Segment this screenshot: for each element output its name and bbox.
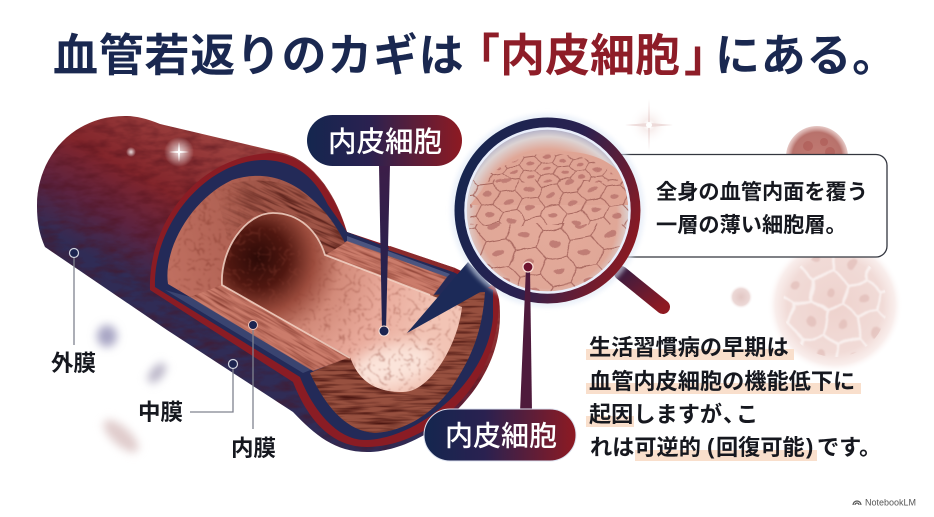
magnifier pointer wedge (407, 262, 491, 333)
lumen rim highlight (222, 213, 430, 358)
decoration: blurred particles (97, 325, 169, 457)
highlight sparkles (126, 137, 194, 167)
magnifier dot (523, 262, 533, 272)
explanatory text block with highlights: れは可逆的 (590, 435, 701, 460)
cut face: red outer layer (150, 153, 499, 447)
label: 中膜 with leader (138, 360, 238, 425)
near striated band (152, 214, 388, 440)
vessel outer wall (adventitia) (37, 116, 500, 452)
title: 」 (684, 30, 729, 81)
magnifying glass (450, 114, 644, 308)
decoration: large pale cell sphere (772, 258, 898, 368)
title (53, 30, 898, 81)
label: 外膜 with leader (51, 248, 96, 376)
top pill label: 内皮細胞: 内皮細胞 (328, 126, 442, 158)
top pill label: 内皮細胞 (307, 115, 462, 166)
bottom pill label: 内皮細胞: 内皮細胞 (445, 420, 557, 452)
callout box: 一層の薄い細胞層。 (656, 213, 847, 237)
explanatory text block with highlights: 血管内皮細胞の機能低下に (589, 369, 855, 394)
explanatory text block with highlights: こ (736, 402, 758, 427)
label: 中膜 with leader: 中膜 (138, 400, 183, 425)
back ring media: striated right half (186, 131, 374, 305)
explanatory text block with highlights (586, 335, 881, 461)
front striated media layer (310, 292, 485, 433)
decoration: reddish cell sphere (786, 126, 848, 188)
label: 外膜 with leader: 外膜 (51, 351, 96, 376)
explanatory text block with highlights: 、 (723, 402, 745, 427)
bottom pill stem (520, 267, 532, 412)
callout box: 全身の血管内面を覆う (656, 180, 868, 204)
explanatory text block with highlights: ) (806, 434, 813, 459)
title: にある。 (715, 30, 898, 81)
label: 内膜 with leader (231, 320, 276, 461)
callout box (580, 154, 887, 257)
explanatory text block with highlights: 回復可能 (716, 435, 805, 460)
top label pointer stem (379, 165, 390, 331)
bottom pill label: 内皮細胞 (424, 409, 576, 461)
decoration: small pale cell (729, 285, 753, 309)
cut face: navy middle band (155, 160, 493, 440)
explanatory text block with highlights: です。 (817, 435, 881, 460)
blood vessel illustration (37, 116, 500, 452)
far side: red lip (388, 246, 455, 272)
back ring media: cell surface (167, 176, 345, 297)
far striated band (306, 200, 466, 338)
top label dot (379, 326, 389, 336)
near side: blue tint on navy strip (165, 290, 313, 373)
magnifier handle (621, 273, 663, 307)
lumen floor with endothelium (222, 213, 462, 396)
title: 内皮細胞 (500, 30, 680, 81)
explanatory text block with highlights: ( (707, 434, 715, 459)
explanatory text block with highlights: 起因しますが (589, 401, 722, 427)
explanatory text block with highlights: 生活習慣病の早期は (589, 335, 789, 360)
far side: blue tint on navy strip (347, 236, 450, 277)
NotebookLM watermark: NotebookLM (865, 498, 916, 508)
title: 血管若返りのカギは (53, 30, 464, 81)
decoration: sparkle star (625, 99, 673, 151)
title: 「 (455, 30, 500, 81)
label: 内膜 with leader: 内膜 (231, 436, 276, 461)
